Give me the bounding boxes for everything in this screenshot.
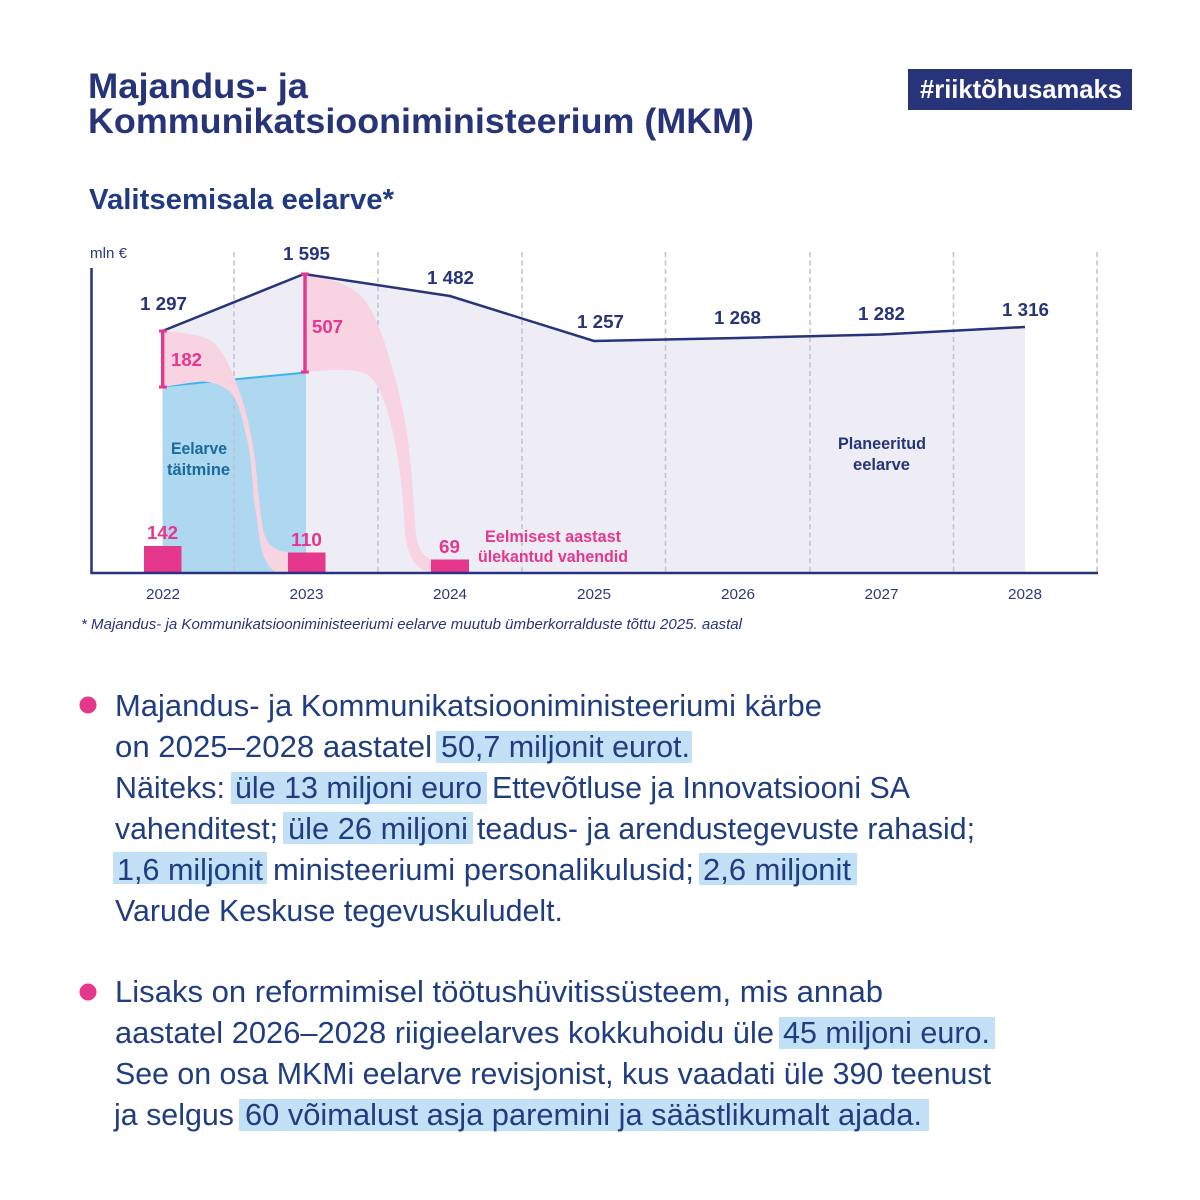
paragraph lines: ja selgus <box>113 1098 234 1132</box>
total budget values: 1 257 <box>577 311 624 332</box>
label: budget execution: Eelarve <box>171 440 227 458</box>
carry-over flow 2023 to 2024 <box>306 274 432 573</box>
text block: unemployment benefit reform <box>80 975 995 1132</box>
label: carried over funds: Eelmisest aastast <box>485 528 621 546</box>
paragraph lines <box>115 689 975 928</box>
footnote: * Majandus- ja Kommunikatsiooniministeeriumi eelarve muutub ümberkorralduste tõttu 2025. aastal <box>81 617 743 633</box>
year axis labels: 2026 <box>721 587 755 603</box>
total budget line <box>162 274 1025 341</box>
axes <box>92 268 1098 573</box>
hashtag badge: #riiktõhusamaks <box>920 74 1122 104</box>
paragraph lines: Lisaks on reformimisel töötushüvitissüsteem, mis annab <box>115 975 883 1009</box>
paragraph lines: See on osa MKMi eelarve revisjonist, kus vaadati üle 390 teenust <box>115 1057 992 1091</box>
bullet <box>80 696 96 714</box>
paragraph lines: Majandus- ja Kommunikatsiooniministeeriumi kärbe <box>115 689 822 723</box>
highlights <box>239 1017 995 1131</box>
carry-over bar 2024 <box>431 560 469 572</box>
title: Kommunikatsiooniministeerium (MKM) <box>88 101 754 141</box>
year axis labels: 2024 <box>433 587 467 603</box>
pink values <box>147 316 460 557</box>
bullet <box>80 984 96 1000</box>
paragraph lines: aastatel 2026–2028 riigieelarves kokkuhoidu üle <box>115 1016 774 1050</box>
text block: ministry cuts <box>80 689 975 928</box>
pink values: 69 <box>439 536 460 557</box>
paragraph lines: 1,6 miljonit <box>117 853 264 887</box>
carry-over flow 2022 to 2023 <box>163 331 288 573</box>
planned budget area <box>162 274 1025 573</box>
total budget values: 1 595 <box>283 243 330 264</box>
paragraph lines: on 2025–2028 aastatel <box>115 730 432 764</box>
paragraph lines: Ettevõtluse ja Innovatsiooni SA <box>492 771 911 805</box>
year axis labels: 2027 <box>864 587 898 603</box>
paragraph lines: vahenditest; <box>115 812 278 846</box>
paragraph lines: 45 miljoni euro. <box>783 1016 990 1050</box>
paragraph lines: Näiteks: <box>115 771 225 805</box>
bracket 507 <box>301 272 309 374</box>
paragraph lines: 50,7 miljonit eurot. <box>441 730 690 764</box>
pink values: 110 <box>291 529 322 550</box>
hashtag badge <box>908 69 1132 110</box>
label: carried over funds: ülekantud vahendid <box>478 548 628 566</box>
title <box>88 66 754 141</box>
label: planned budgets: eelarve <box>853 456 910 474</box>
label: planned budgets <box>838 435 926 474</box>
paragraph lines: Varude Keskuse tegevuskuludelt. <box>115 894 563 928</box>
pink values: 182 <box>171 349 202 370</box>
total budget values: 1 297 <box>140 293 187 314</box>
year gridlines <box>234 252 1097 572</box>
title: Majandus- ja <box>88 66 308 106</box>
area chart: budget <box>90 243 1098 603</box>
total budget values: 1 482 <box>427 267 474 288</box>
bracket 182 <box>159 330 167 388</box>
budget execution area <box>162 372 306 573</box>
paragraph lines: ministeeriumi personalikulusid; <box>273 853 694 887</box>
carry-over bar 2022 <box>144 546 182 572</box>
axis unit: mln € <box>90 246 127 262</box>
carry-over bar 2023 <box>288 552 326 572</box>
pink values: 507 <box>312 316 343 337</box>
paragraph lines <box>113 975 992 1132</box>
year axis labels <box>146 587 1042 603</box>
paragraph lines: 60 võimalust asja paremini ja säästlikumalt ajada. <box>245 1098 922 1132</box>
pink values: 142 <box>147 522 178 543</box>
budget execution line <box>162 372 306 386</box>
total budget values <box>140 243 1049 332</box>
total budget values: 1 282 <box>858 303 905 324</box>
label: budget execution <box>167 440 230 479</box>
year axis labels: 2025 <box>577 587 611 603</box>
paragraph lines: teadus- ja arendustegevuste rahasid; <box>477 812 975 846</box>
paragraph lines: 2,6 miljonit <box>703 853 852 887</box>
label: planned budgets: Planeeritud <box>838 435 926 453</box>
paragraph lines: üle 13 miljoni euro <box>235 771 482 805</box>
chart heading: Valitsemisala eelarve* <box>89 184 395 216</box>
label: carried over funds <box>478 528 628 566</box>
year axis labels: 2023 <box>290 587 324 603</box>
year axis labels: 2022 <box>146 587 180 603</box>
label: budget execution: täitmine <box>167 461 230 479</box>
year axis labels: 2028 <box>1008 587 1042 603</box>
total budget values: 1 268 <box>714 307 761 328</box>
total budget values: 1 316 <box>1002 299 1049 320</box>
paragraph lines: üle 26 miljoni <box>288 812 468 846</box>
highlights <box>113 731 857 885</box>
